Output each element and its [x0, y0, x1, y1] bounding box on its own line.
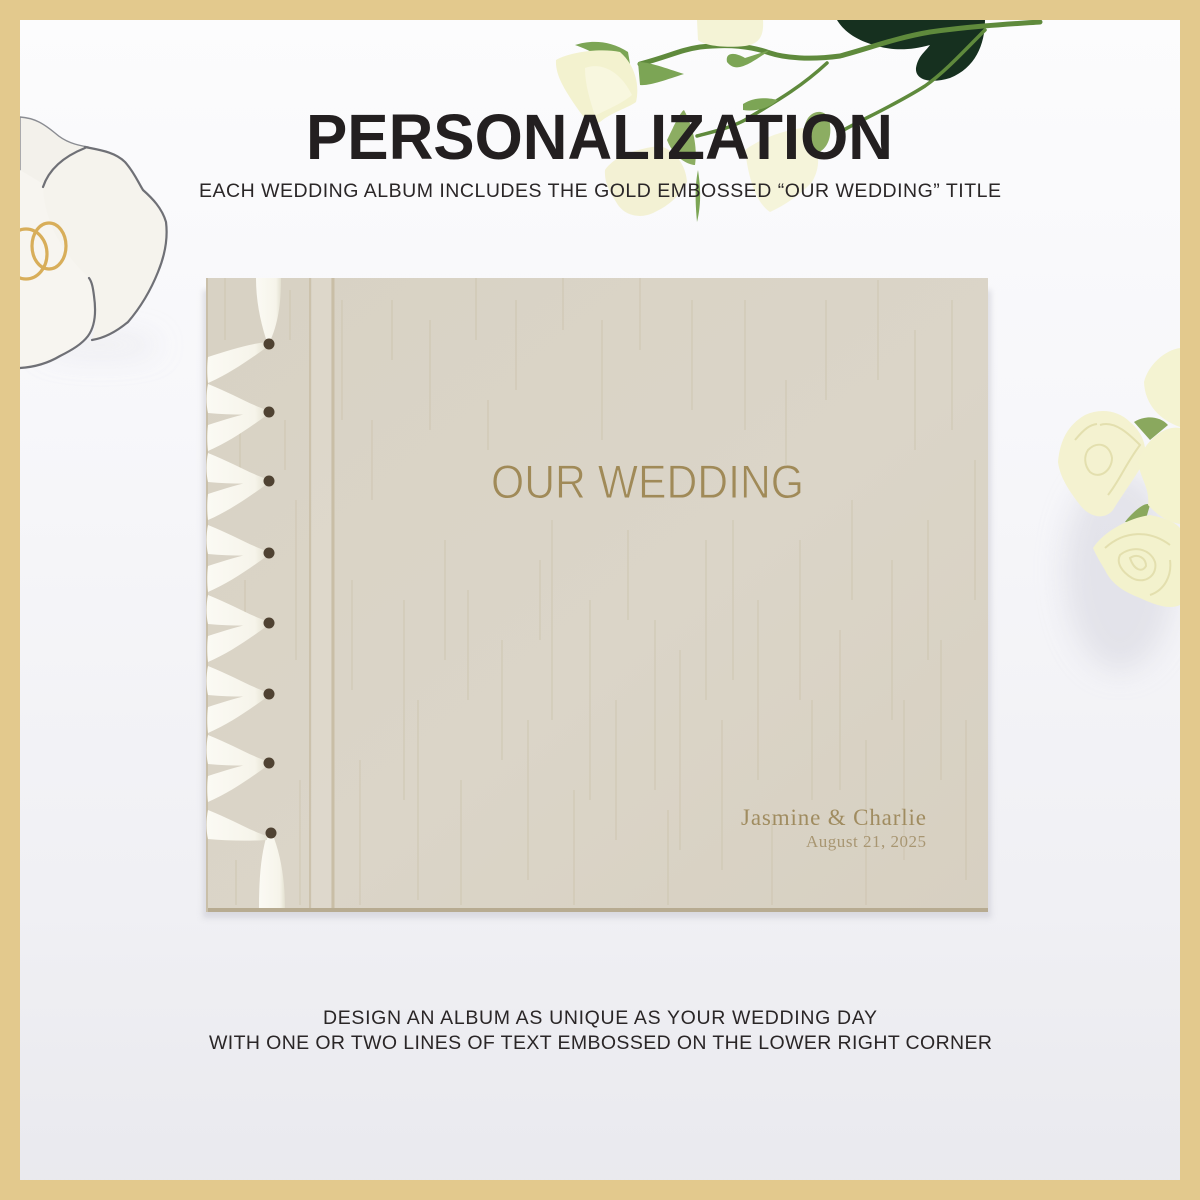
- ribbon binding: [206, 278, 285, 908]
- rose upper right: [1144, 348, 1180, 427]
- ribbon tail top: [256, 278, 281, 339]
- album shadow: [203, 290, 991, 918]
- punched holes: [264, 338, 276, 838]
- top rose: [697, 20, 763, 47]
- dish back petal: [20, 117, 88, 240]
- ribbon loops: [206, 342, 267, 841]
- photo: roses on stems, top: [556, 20, 1040, 222]
- soft shadows of props: [40, 333, 1175, 670]
- album bottom edge: [207, 908, 988, 912]
- album cover: [203, 278, 991, 918]
- dish silver rim: [20, 147, 167, 368]
- rose lower: [1093, 515, 1180, 607]
- silk slub texture: [225, 278, 975, 905]
- gold title: our wedding: OUR WEDDING: [491, 455, 804, 508]
- bud leaves: [667, 110, 830, 165]
- left edge: [206, 278, 208, 912]
- lower left rose: [605, 146, 687, 216]
- dish front petal: [43, 148, 167, 340]
- dark leaves: [837, 20, 985, 81]
- rose left: [1058, 411, 1145, 516]
- names: Jasmine & Charlie: [741, 805, 926, 830]
- ribbon tail bottom: [259, 838, 285, 908]
- gold rings: [5, 223, 66, 279]
- bottom caption: [209, 1007, 992, 1054]
- green stems: [640, 22, 1040, 136]
- title: PERSONALIZATION: [306, 101, 893, 173]
- album board: [207, 278, 988, 912]
- spine highlight band: [312, 278, 331, 908]
- left rose: [556, 50, 637, 124]
- photo: ceramic dish with gold rings: [5, 117, 167, 368]
- rose middle right: [1138, 428, 1180, 524]
- rose leaves: [1125, 417, 1168, 522]
- subtitle: EACH WEDDING ALBUM INCLUDES THE GOLD EMBOSSED “OUR WEDDING” TITLE: [199, 180, 1001, 202]
- dish lower petal: [20, 170, 95, 368]
- caption line one: DESIGN AN ALBUM AS UNIQUE AS YOUR WEDDING DAY: [323, 1007, 877, 1029]
- caption line two: WITH ONE OR TWO LINES OF TEXT EMBOSSED ON THE LOWER RIGHT CORNER: [209, 1032, 992, 1054]
- photo: cream roses, right: [1058, 348, 1180, 607]
- spine groove lines: [310, 278, 333, 908]
- sepals and small leaves: [575, 42, 778, 222]
- date: August 21, 2025: [806, 832, 926, 851]
- lower right rose: [745, 128, 818, 212]
